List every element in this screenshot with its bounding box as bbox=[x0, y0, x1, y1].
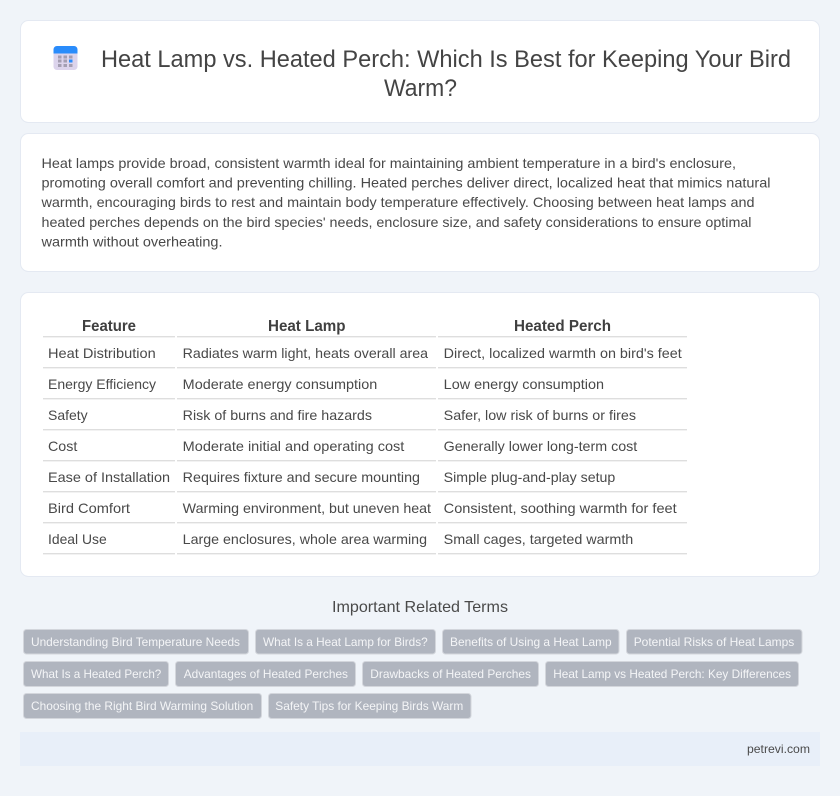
row: safety: Risk of burns and fire hazards bbox=[183, 407, 372, 423]
row: ideal use: Large enclosures, whole area warming bbox=[183, 531, 427, 547]
footer bbox=[20, 732, 820, 766]
tag: What Is a Heated Perch? bbox=[31, 667, 162, 681]
row: safety: Safer, low risk of burns or fires bbox=[444, 407, 636, 423]
row: ideal use: Ideal Use bbox=[48, 531, 107, 547]
tag: Benefits of Using a Heat Lamp bbox=[450, 635, 612, 649]
row: ease of installation: Requires fixture and secure mounting bbox=[183, 469, 420, 485]
row: bird comfort: Bird Comfort bbox=[48, 500, 130, 516]
row: ideal use bbox=[43, 531, 687, 554]
summary text: warmth, encouraging birds to rest and maintain body temperature effectively. Choosing between heat lamps and bbox=[40, 194, 755, 210]
icon: calendar grid bbox=[54, 46, 78, 70]
row: ideal use: Small cages, targeted warmth bbox=[444, 531, 633, 547]
row: bird comfort: Consistent, soothing warmth for feet bbox=[444, 500, 677, 516]
footer: petrevi.com bbox=[747, 742, 810, 756]
row: ease of installation: Simple plug-and-play setup bbox=[444, 469, 616, 485]
tag bbox=[256, 630, 436, 654]
row: safety: Safety bbox=[48, 407, 88, 423]
tag: Choosing the Right Bird Warming Solution bbox=[31, 699, 253, 713]
title bbox=[101, 46, 791, 102]
row: safety bbox=[43, 407, 687, 430]
table header bbox=[43, 318, 687, 337]
summary text: heated perches depends on the bird species' needs, enclosure size, and safety considerations to ensure optimal bbox=[42, 214, 752, 230]
row: cost: Generally lower long-term cost bbox=[444, 438, 637, 454]
panel: related term tags bbox=[24, 630, 802, 718]
row: heat distribution bbox=[43, 345, 687, 368]
row: ease of installation bbox=[43, 469, 687, 492]
row: bird comfort: Warming environment, but uneven heat bbox=[183, 500, 431, 516]
tag bbox=[362, 662, 538, 686]
row: cost: Cost bbox=[48, 438, 77, 454]
tag bbox=[24, 694, 262, 718]
tag: Understanding Bird Temperature Needs bbox=[31, 635, 240, 649]
tag: Safety Tips for Keeping Birds Warm bbox=[275, 699, 463, 713]
summary text: warmth without overheating. bbox=[40, 233, 223, 249]
row: energy efficiency bbox=[43, 376, 687, 399]
summary text: Heat lamps provide broad, consistent warmth ideal for maintaining ambient temperature in a bird's enclosure, bbox=[42, 155, 736, 171]
row: energy efficiency: Energy Efficiency bbox=[48, 376, 156, 392]
row: cost bbox=[43, 438, 687, 461]
row: energy efficiency: Moderate energy consumption bbox=[183, 376, 377, 392]
row: heat distribution: Heat Distribution bbox=[48, 345, 156, 361]
tag bbox=[268, 694, 471, 718]
heading: important related terms: Important Related Terms bbox=[332, 599, 508, 616]
row: heat distribution: Direct, localized warmth on bird's feet bbox=[444, 345, 682, 361]
table header: Heated Perch bbox=[514, 318, 611, 335]
tag: Potential Risks of Heat Lamps bbox=[634, 635, 794, 649]
row: bird comfort bbox=[43, 500, 687, 523]
tag: What Is a Heat Lamp for Birds? bbox=[263, 635, 428, 649]
tag bbox=[176, 662, 356, 686]
tag bbox=[24, 630, 248, 654]
row: ease of installation: Ease of Installation bbox=[48, 469, 170, 485]
summary text bbox=[40, 155, 771, 249]
tag: Advantages of Heated Perches bbox=[184, 667, 348, 681]
table header: Heat Lamp bbox=[268, 318, 346, 335]
panel: summary bbox=[20, 134, 820, 272]
tag: Drawbacks of Heated Perches bbox=[370, 667, 531, 681]
summary text: promoting overall comfort and preventing chilling. Heated perches deliver direct, localized heat that mimics natural bbox=[42, 175, 770, 191]
row: energy efficiency: Low energy consumption bbox=[444, 376, 604, 392]
table header: Feature bbox=[82, 318, 136, 335]
tag bbox=[546, 662, 798, 686]
tag bbox=[626, 630, 802, 654]
panel: title card bbox=[20, 20, 820, 122]
tag bbox=[24, 662, 168, 686]
title: Heat Lamp vs. Heated Perch: Which Is Best for Keeping Your Bird bbox=[101, 46, 791, 73]
row: heat distribution: Radiates warm light, heats overall area bbox=[183, 345, 428, 361]
title: Warm? bbox=[384, 75, 457, 102]
panel: comparison table bbox=[20, 292, 820, 576]
tag: Heat Lamp vs Heated Perch: Key Differences bbox=[553, 667, 791, 681]
tag bbox=[442, 630, 619, 654]
row: cost: Moderate initial and operating cost bbox=[183, 438, 404, 454]
